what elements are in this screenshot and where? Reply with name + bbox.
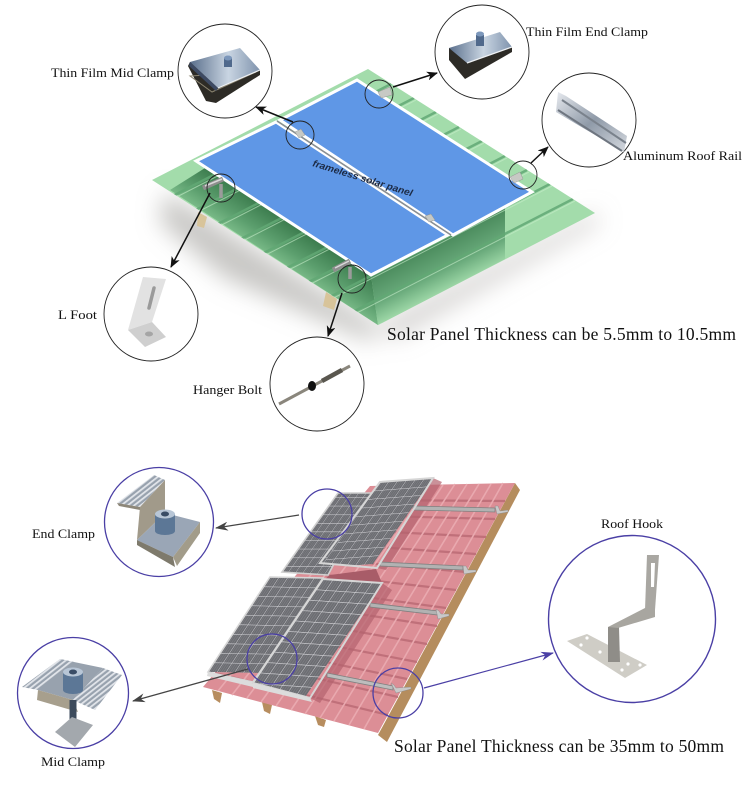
label: Hanger Bolt [193,382,262,397]
wooden roof supports [197,212,337,310]
roof hooks [391,506,508,693]
solar module: lower left [207,577,323,687]
detail circles on roof [247,489,423,718]
wooden fascia [378,483,520,742]
panel: tile roof with solar modules [18,468,724,769]
thickness note: Solar Panel Thickness can be 5.5mm to 10.5mm [387,324,736,344]
arrow: roof hook [424,653,553,688]
callout: hanger bolt [193,337,364,431]
panel label: frameless solar panel [311,158,414,199]
callout: mid clamp [18,638,128,769]
shadows under modules [310,478,442,703]
label: Roof Hook [601,516,664,531]
center rail [277,121,451,235]
red tile roof [203,483,515,733]
clamps on the panel [295,87,523,222]
callout: thin film mid clamp [51,24,272,118]
callout: L foot [58,267,198,361]
wooden roof beams [212,690,326,727]
solar panel: upper [280,80,532,235]
panel: frameless solar panel on metal roof [51,5,742,431]
arrow: end clamp [216,515,299,528]
detail circles on roof [207,80,537,293]
solar module: lower right [242,579,382,703]
label: L Foot [58,307,97,322]
label: Thin Film Mid Clamp [51,65,174,80]
solar module: upper right [320,478,433,568]
arrow: mid clamp [133,669,248,701]
solar module: upper left [280,492,372,576]
green corrugated roof [152,69,595,325]
hanger bolt on roof [333,261,350,279]
label: End Clamp [32,526,95,541]
mounting rails [327,506,495,690]
solar panel: lower [196,122,448,275]
callout: end clamp [32,468,214,576]
callout: thin film end clamp [435,5,648,99]
arrows [171,73,548,336]
thickness note: Solar Panel Thickness can be 35mm to 50mm [394,736,724,756]
callout: roof hook [548,516,716,702]
label: Aluminum Roof Rail [623,148,742,163]
callout: aluminum roof rail [542,73,742,167]
label: Mid Clamp [41,754,105,769]
roof shadow [160,192,600,342]
label: Thin Film End Clamp [526,24,648,39]
L foot on roof [203,179,223,198]
